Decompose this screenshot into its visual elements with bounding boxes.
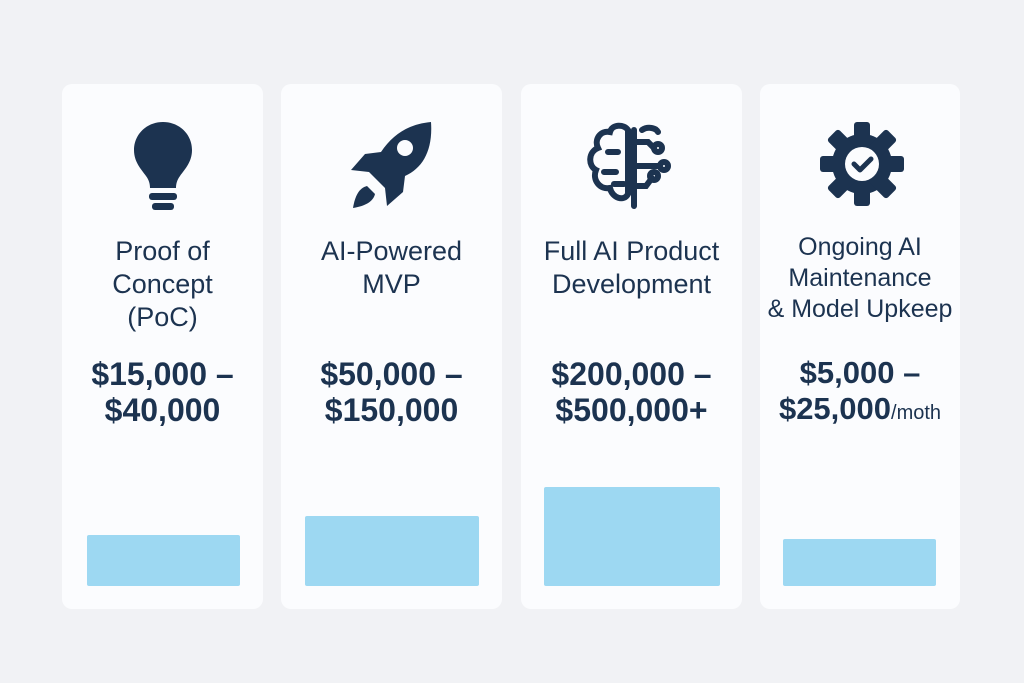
price: $25,000/moth [779,391,941,426]
panel: AI-powered MVP [281,84,502,609]
title [768,233,952,323]
title [112,236,213,332]
title: Ongoing AI [798,233,922,261]
title: Maintenance [788,264,932,292]
title: Full AI Product [544,236,719,266]
title: (PoC) [127,302,198,332]
title: & Model Upkeep [768,295,952,323]
price [779,355,941,426]
title [544,236,720,299]
icon: light bulb [134,122,192,210]
price: $50,000 – [320,356,463,392]
title: Concept [112,269,213,299]
bar [783,539,936,586]
bar [305,516,479,586]
price: $150,000 [325,392,458,428]
title: MVP [362,269,421,299]
title [321,236,462,299]
bar [87,535,240,586]
title: AI-Powered [321,236,462,266]
price [551,356,712,428]
title: Development [552,269,711,299]
price [91,356,234,428]
price: $500,000+ [555,392,708,428]
panel: ongoing maintenance [760,84,960,609]
title: Proof of [115,236,210,266]
icon: gear with check [820,122,904,206]
price: $200,000 – [551,356,712,392]
price: $40,000 [105,392,220,428]
price: $15,000 – [91,356,234,392]
icon: brain [587,122,671,209]
icon: rocket [351,122,432,208]
panel: full AI product development [521,84,742,609]
price [320,356,463,428]
panel: proof of concept [62,84,263,609]
bar [544,487,720,586]
price: $5,000 – [800,355,920,390]
